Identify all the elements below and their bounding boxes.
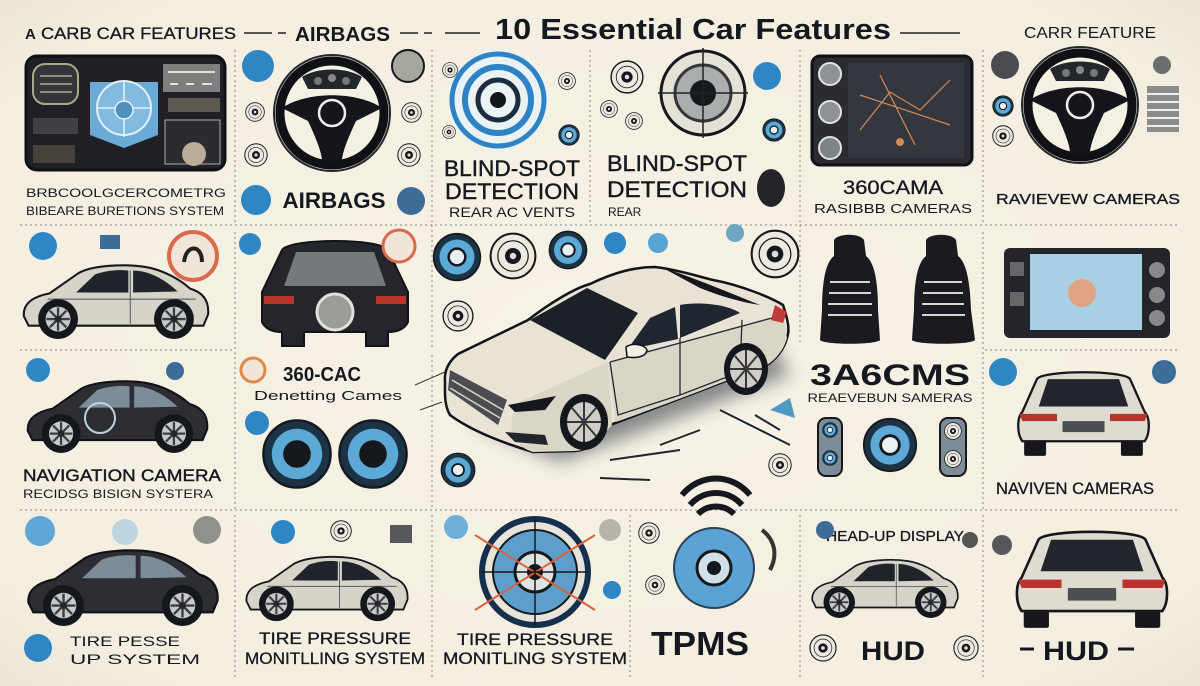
car: dark hatchback: [26, 358, 207, 453]
label: blind-spot detection 1: REAR AC VENTS: [449, 204, 575, 220]
panel: dashboard display: [26, 56, 225, 170]
car: light sedan with icons: [24, 232, 217, 339]
label: blind-spot detection 2: [607, 151, 747, 219]
central car illustration: [445, 267, 790, 462]
label: tire pressure up system: TIRE PESSE: [70, 633, 180, 649]
label: 360-cac: Denetting Cames: [254, 388, 403, 403]
caption: panel 1: BIBEARE BURETIONS SYSTEM: [26, 204, 224, 218]
label: 3A6CMS: REAEVEBUN SAMERAS: [808, 391, 972, 405]
label: 360-cac: 360-CAC: [283, 364, 361, 386]
panel: blind-spot target 2: [601, 48, 785, 207]
title: 10 Essential Car Features: [495, 14, 891, 46]
label: navigation camera: [23, 466, 222, 501]
car: HUD sedan: [812, 521, 978, 618]
panel: car seats: [820, 235, 975, 344]
label: tire pressure monitoring 2: TIRE PRESSURE: [457, 630, 613, 649]
label: blind-spot detection 1: DETECTION: [445, 179, 579, 204]
car: light rear view: [989, 358, 1176, 456]
label: blind-spot detection 1: [444, 156, 580, 220]
label: naviven cameras: NAVIVEN CAMERAS: [996, 479, 1154, 498]
car: dark sedan: [25, 516, 221, 626]
label: TPMS: TPMS: [651, 625, 749, 662]
label: navigation camera: NAVIGATION CAMERA: [23, 466, 222, 485]
panel: 360 camera lenses: [241, 358, 407, 488]
label: blind-spot detection 2: DETECTION: [607, 177, 747, 202]
label: blind-spot detection 2: REAR: [608, 205, 642, 219]
caption: panel 1: [26, 186, 226, 218]
panel: TPMS wifi sensor: [639, 478, 774, 608]
label: tire pressure monitoring 2: [443, 630, 627, 668]
caption: panel 1: BRBCOOLGCERCOMETRG: [26, 186, 226, 200]
label: navigation camera: RECIDSG BISIGN SYSTERA: [23, 487, 213, 501]
label: blind-spot detection 1: BLIND-SPOT: [444, 156, 580, 181]
panel: infotainment screen: [1004, 248, 1170, 338]
label: tire pressure up system: UP SYSTEM: [70, 651, 200, 667]
panel: 360 camera screen: [812, 56, 972, 165]
label: HUD: HUD: [861, 636, 925, 666]
panel: airbags steering wheel: [242, 50, 424, 171]
label: blind-spot detection 2: BLIND-SPOT: [607, 151, 747, 176]
car: HUD rear view: [992, 532, 1167, 628]
label: tire pressure monitoring 1: [245, 629, 425, 668]
panel: camera buttons: [818, 418, 966, 476]
label: HUD right: HUD: [1043, 636, 1109, 666]
panel: blind-spot target 1: [442, 50, 579, 150]
top header labels: AIRBAGS: [295, 24, 390, 46]
label: 360-cac: [254, 364, 403, 403]
car: grey sedan: [246, 520, 412, 621]
pointer lines to car: [415, 372, 445, 410]
label: tire pressure monitoring 1: MONITLLING SYSTEM: [245, 649, 425, 668]
panel: steering wheel right: [991, 47, 1179, 163]
label: tire pressure monitoring 1: TIRE PRESSURE: [259, 629, 411, 648]
label: airbags: [241, 185, 425, 215]
label: head-up display: HEAD-UP DISPLAY: [826, 528, 964, 545]
car: dark SUV rear: [239, 230, 415, 346]
label: 360 cameras: RASIBBB CAMERAS: [814, 201, 972, 216]
label: rearview cameras: RAVIEVEW CAMERAS: [996, 191, 1180, 208]
label: tire pressure up system: [24, 633, 200, 667]
label: 360 cameras: [814, 178, 972, 216]
top header labels: CARR FEATURE: [1024, 25, 1156, 42]
small icons around central car: [434, 224, 798, 487]
label: tire pressure monitoring 2: MONITLING SYSTEM: [443, 649, 627, 668]
label: 3A6CMS: 3A6CMS: [810, 359, 970, 392]
label: airbags: AIRBAGS: [282, 188, 386, 213]
label: 3A6CMS: [808, 359, 972, 405]
top header labels: CARB CAR FEATURES: [41, 24, 236, 43]
panel: pressure gauge: [444, 515, 621, 625]
label: HUD: [810, 635, 978, 666]
top header labels: [25, 24, 1156, 46]
top header labels: A: [25, 26, 36, 43]
label: 360 cameras: 360CAMA: [843, 178, 943, 199]
label: HUD right: [1020, 636, 1134, 666]
